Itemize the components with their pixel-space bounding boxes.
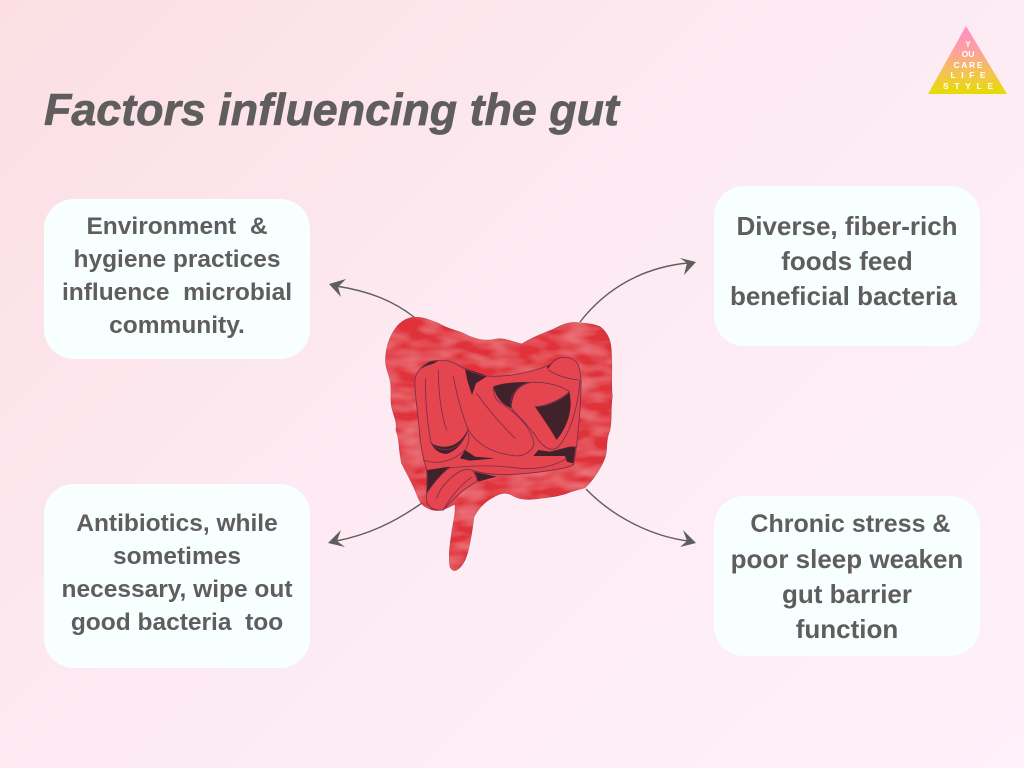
panel: environment and hygiene: influence microbial — [62, 279, 292, 306]
panel: antibiotics: Antibiotics, while — [76, 510, 278, 537]
panel: environment and hygiene: community. — [109, 312, 245, 339]
panel: antibiotics: sometimes — [113, 543, 241, 570]
panel: fiber-rich foods: Diverse, fiber-rich — [736, 211, 958, 241]
illustration: intestines — [386, 317, 612, 570]
panel: stress and sleep: Chronic stress & — [750, 510, 950, 538]
large intestine — [386, 317, 612, 570]
panel: environment and hygiene — [44, 199, 310, 359]
panel: stress and sleep: gut barrier — [782, 579, 912, 609]
small intestine — [415, 357, 581, 510]
logo — [928, 26, 1007, 94]
logo text: CARE — [954, 60, 983, 70]
arrow: to stress panel — [586, 489, 696, 547]
arrow: to antibiotics panel — [328, 503, 422, 547]
logo text: Y — [965, 39, 971, 49]
logo text: STYLE — [943, 81, 993, 91]
panel: environment and hygiene: Environment & — [86, 213, 268, 240]
panel: fiber-rich foods: foods feed — [781, 246, 913, 276]
logo text: OU — [962, 49, 974, 59]
arrow: to environment panel — [329, 279, 414, 317]
logo text: LIFE — [950, 70, 986, 80]
tube outlines — [415, 357, 581, 510]
panel: fiber-rich foods: beneficial bacteria — [730, 281, 957, 311]
dark gaps — [419, 360, 576, 493]
panel: stress and sleep: poor sleep weaken — [731, 544, 963, 574]
tube fill — [415, 357, 581, 510]
panel: fiber-rich foods — [714, 186, 980, 346]
panel: antibiotics: good bacteria too — [71, 609, 283, 636]
logo triangle — [928, 26, 1007, 94]
logo text — [943, 39, 993, 91]
panel: environment and hygiene: hygiene practices — [74, 246, 280, 273]
panel: stress and sleep — [714, 496, 980, 656]
title: Factors influencing the gut — [44, 85, 619, 135]
arrow: to fiber panel — [580, 258, 696, 322]
panel: stress and sleep: function — [796, 614, 898, 644]
panel: antibiotics: necessary, wipe out — [61, 576, 293, 603]
panel: antibiotics — [44, 484, 310, 668]
